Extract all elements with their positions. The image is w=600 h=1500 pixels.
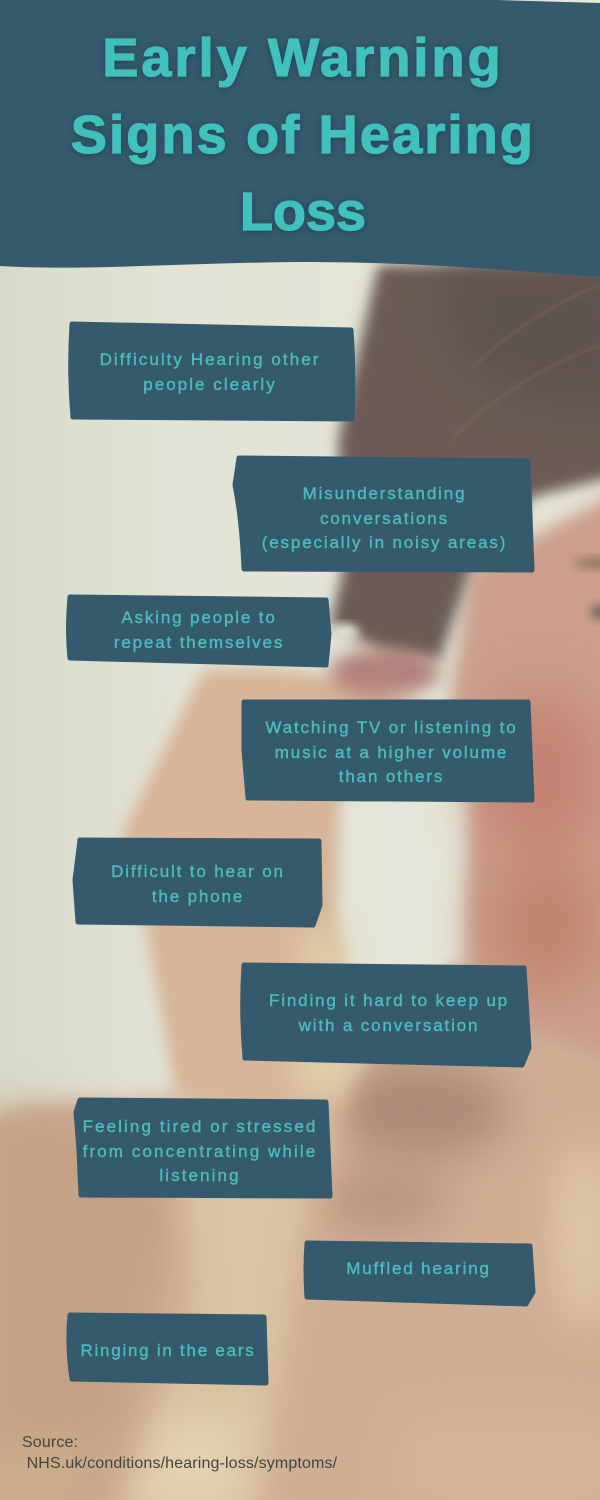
card 4 text: music at a higher volume <box>275 743 508 762</box>
card 4 shape <box>244 702 532 800</box>
title: Early Warning <box>102 28 504 88</box>
card 3 shape <box>68 597 329 665</box>
card 9 text: Ringing in the ears <box>80 1341 256 1360</box>
card 5 text: Difficult to hear on <box>111 862 285 881</box>
source note: Source: <box>22 1434 78 1451</box>
card 7 text: Feeling tired or stressed <box>83 1117 317 1136</box>
card 2 shape <box>235 458 532 570</box>
title: Signs of Hearing <box>71 105 535 165</box>
card 7 text: from concentrating while <box>83 1142 317 1161</box>
card 5 text <box>111 862 285 906</box>
card 3 text: Asking people to <box>121 608 277 627</box>
title: Loss <box>240 182 366 242</box>
card 2 text: Misunderstanding <box>303 484 466 503</box>
card 8 shape <box>306 1243 533 1304</box>
card 6 text: Finding it hard to keep up <box>269 991 509 1010</box>
card 9 shape <box>69 1315 266 1383</box>
title <box>71 28 535 242</box>
card 7 text <box>82 1117 317 1185</box>
card 7 shape <box>76 1100 330 1196</box>
header banner <box>0 0 600 277</box>
card 4 text: Watching TV or listening to <box>265 718 518 737</box>
card 5 text: the phone <box>152 887 244 906</box>
card 7 text: listening <box>159 1166 241 1185</box>
card 6 shape <box>243 965 529 1065</box>
card 1 text <box>100 350 320 394</box>
card 6 text: with a conversation <box>299 1016 479 1035</box>
source note: NHS.uk/conditions/hearing-loss/symptoms/ <box>27 1455 337 1472</box>
card 4 text: than others <box>339 767 444 786</box>
card 2 text <box>262 484 507 552</box>
card 4 text <box>265 718 518 786</box>
card 2 text: (especially in noisy areas) <box>262 533 507 552</box>
card 1 shape <box>71 324 353 419</box>
card 1 text: Difficulty Hearing other <box>100 350 320 369</box>
card 8 text: Muffled hearing <box>346 1259 491 1278</box>
card 5 shape <box>75 840 320 925</box>
card 3 text: repeat themselves <box>114 633 284 652</box>
card 2 text: conversations <box>320 509 449 528</box>
card 1 text: people clearly <box>143 375 277 394</box>
card 3 text <box>114 608 284 652</box>
source note <box>22 1434 337 1472</box>
card 6 text <box>269 991 509 1035</box>
